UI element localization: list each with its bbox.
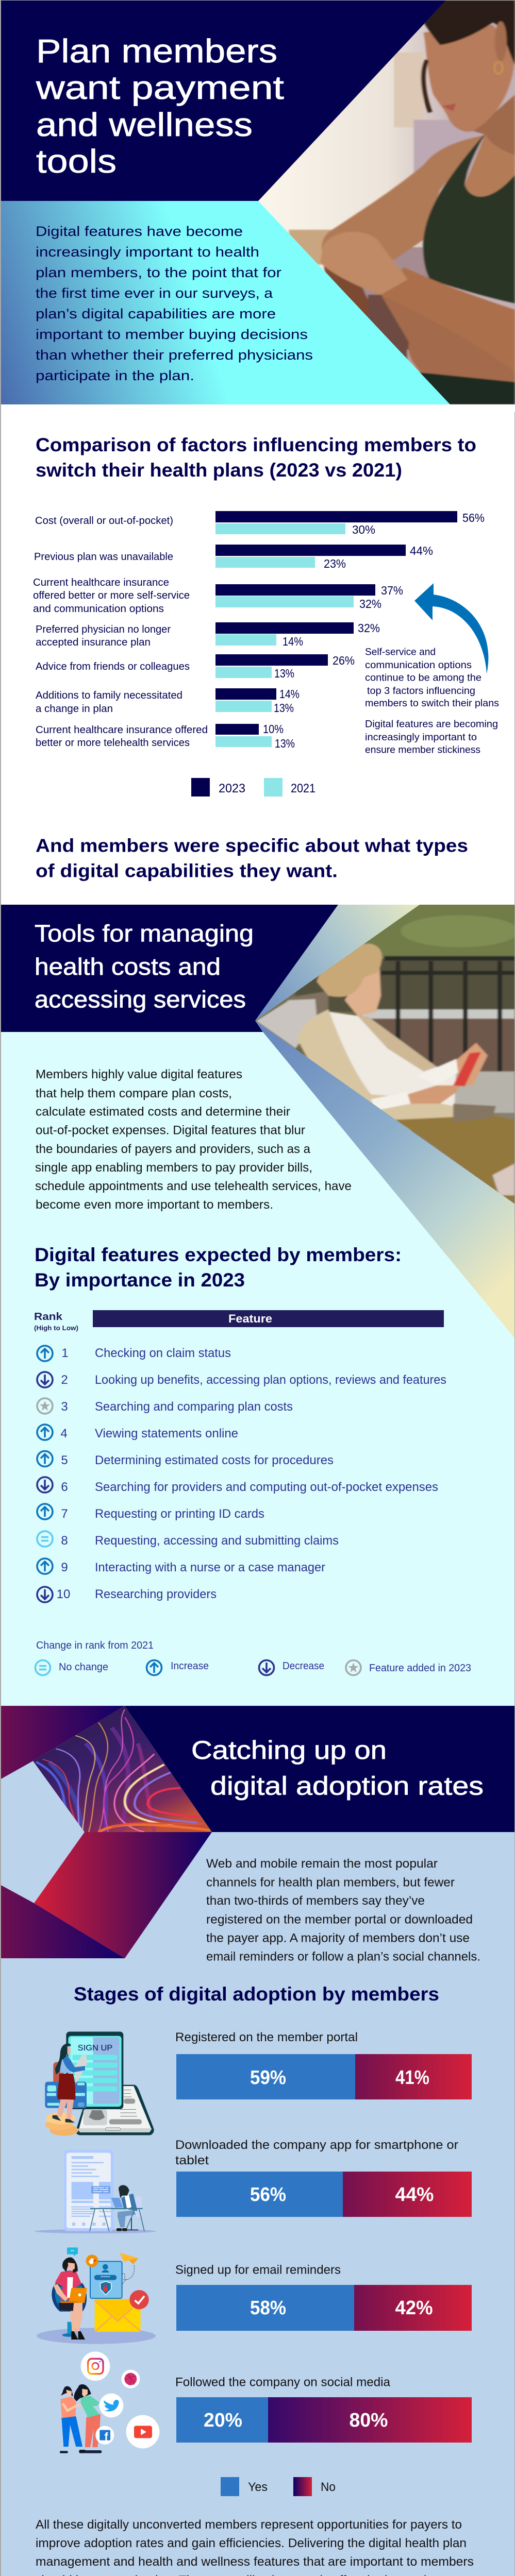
- icon: up: [37, 1346, 53, 1361]
- bar chart: 32%: [358, 621, 380, 635]
- label and bar: member portal: 41%: [395, 2067, 429, 2089]
- intro text: plan members, to the point that for: [36, 265, 281, 280]
- icon: down: [37, 1587, 53, 1602]
- closing text: management and health and wellness features that are important to members: [36, 2555, 474, 2569]
- callout: top 3 factors influencing: [367, 685, 475, 697]
- label and bar: email reminders: [175, 2263, 472, 2331]
- label and bar: social media: 20%: [204, 2410, 242, 2431]
- title: Tools for managing: [35, 920, 254, 947]
- closing text: [35, 2518, 474, 2576]
- bar chart: better or more telehealth services: [36, 737, 190, 749]
- bar chart: accepted insurance plan: [36, 637, 151, 648]
- icon: up: [37, 1451, 53, 1466]
- table: ranked features: 9: [61, 1561, 68, 1574]
- bar chart: 26%: [333, 654, 355, 667]
- illustration: email reminders: ******: [101, 2276, 110, 2280]
- panel: comparison of switching factors: [33, 434, 499, 881]
- table: ranked features: 3: [61, 1400, 68, 1414]
- table: ranked features: Determining estimated costs for procedures: [95, 1453, 334, 1467]
- callout: continue to be among the: [365, 672, 481, 683]
- callout: [365, 646, 499, 755]
- illustration: email reminders: •••: [71, 2249, 74, 2253]
- intro text: plan’s digital capabilities are more: [36, 306, 276, 321]
- title: want payment: [36, 69, 284, 106]
- legend: change in rank: No change: [59, 1662, 108, 1673]
- label and bar: member portal: Registered on the member portal: [175, 2030, 358, 2044]
- icon: up: [37, 1425, 53, 1440]
- intro text: increasingly important to health: [36, 244, 259, 260]
- label and bar: social media: [175, 2375, 472, 2443]
- bar chart: 14%: [283, 635, 303, 648]
- bar chart: offered better or more self-service: [33, 590, 190, 601]
- heading: members specifics: of digital capabilities they want.: [36, 860, 338, 881]
- body text: email reminders or follow a plan’s social channels.: [206, 1950, 480, 1964]
- heading: [35, 1244, 402, 1291]
- table: ranked features: Interacting with a nurse or a case manager: [95, 1561, 325, 1574]
- legend: [191, 778, 315, 796]
- legend: yes no: No: [321, 2480, 336, 2494]
- panel: catching up on digital adoption: [0, 1703, 515, 2576]
- label and bar: company app: tablet: [175, 2154, 209, 2167]
- legend: change in rank: Feature added in 2023: [369, 1663, 471, 1674]
- illustration: downloaded app: [35, 2149, 156, 2233]
- table: rank header: Rank: [34, 1311, 63, 1323]
- table: ranked features: Looking up benefits, accessing plan options, reviews and features: [95, 1373, 446, 1387]
- table: ranked features: Requesting or printing ID cards: [95, 1507, 264, 1521]
- body text: schedule appointments and use telehealth services, have: [35, 1179, 352, 1193]
- callout: Digital features are becoming: [365, 718, 498, 730]
- bar chart: [33, 511, 485, 750]
- callout: increasingly important to: [365, 732, 477, 743]
- heading: Comparison of factors influencing members to: [36, 434, 476, 455]
- intro text: important to member buying decisions: [36, 327, 308, 342]
- body text: than two-thirds of members say they’ve: [206, 1894, 425, 1908]
- bar chart: Current healthcare insurance offered: [36, 724, 208, 736]
- illustration: social media: [60, 2351, 159, 2453]
- heading: switch their health plans (2023 vs 2021): [36, 460, 402, 481]
- bar chart: 13%: [274, 667, 294, 680]
- image: abstract light swirl: [31, 1703, 217, 1837]
- bar chart: 23%: [324, 557, 346, 570]
- callout: members to switch their plans: [365, 698, 499, 709]
- legend: yes no: [221, 2477, 336, 2496]
- heading: members specifics: [36, 835, 468, 881]
- bar chart: Current healthcare insurance: [33, 577, 169, 588]
- body text: Members highly value digital features: [36, 1067, 242, 1081]
- table: ranked features: 4: [60, 1427, 68, 1440]
- legend: change in rank: Increase: [171, 1660, 209, 1672]
- icon: down: [37, 1372, 53, 1387]
- arrow: curved pointer: [414, 583, 488, 674]
- heading: Digital features expected by members:: [35, 1244, 402, 1265]
- table: ranked features: 8: [61, 1534, 68, 1548]
- label and bar: company app: Downloaded the company app for smartphone or: [175, 2138, 458, 2152]
- icon: up: [37, 1504, 53, 1519]
- intro text: [36, 224, 313, 383]
- photo: woman using phone on porch: [247, 902, 515, 1211]
- legend: 2023: [219, 782, 245, 795]
- legend: change in rank: [35, 1640, 471, 1675]
- illustration: social media: f: [104, 2430, 108, 2443]
- bar chart: 44%: [410, 544, 433, 557]
- table: rank header: (High to Low): [34, 1324, 78, 1332]
- bar chart: 56%: [462, 511, 485, 524]
- bar chart: Cost (overall or out-of-pocket): [35, 515, 173, 527]
- label and bar: company app: [175, 2138, 472, 2217]
- bar chart: 37%: [381, 584, 403, 597]
- table: ranked features: Viewing statements online: [95, 1427, 238, 1440]
- legend: yes no: Yes: [248, 2480, 268, 2494]
- icon: down: [37, 1477, 53, 1493]
- table: ranked features: Requesting, accessing and submitting claims: [95, 1534, 339, 1548]
- body text: single app enabling members to pay provider bills,: [35, 1161, 312, 1175]
- body text: calculate estimated costs and determine their: [36, 1105, 290, 1119]
- callout: ensure member stickiness: [365, 744, 480, 755]
- closing text: All these digitally unconverted members represent opportunities for payers to: [36, 2518, 462, 2532]
- body text: Web and mobile remain the most popular: [206, 1857, 438, 1871]
- icon: up: [37, 1558, 53, 1574]
- intro text: Digital features have become: [36, 224, 243, 239]
- bar chart: Additions to family necessitated: [36, 690, 182, 701]
- label and bar: email reminders: Signed up for email reminders: [175, 2263, 341, 2277]
- illustration: sign up: SIGN UP: [78, 2044, 112, 2053]
- body text: [206, 1857, 480, 1964]
- icon: no change: [37, 1531, 53, 1547]
- body text: the boundaries of payers and providers, such as a: [36, 1142, 311, 1156]
- intro text: participate in the plan.: [36, 368, 194, 383]
- bar chart: Previous plan was unavailable: [34, 551, 173, 563]
- label and bar: email reminders: 58%: [250, 2297, 286, 2319]
- table: ranked features: Researching providers: [95, 1587, 217, 1601]
- title: and wellness: [36, 106, 253, 143]
- table: rank header: [34, 1310, 444, 1332]
- title: [191, 1736, 484, 1800]
- illustration: email reminders: [37, 2247, 156, 2344]
- bar chart: 32%: [359, 597, 381, 611]
- closing text: improve adoption rates and gain efficiencies. Delivering the digital health plan: [36, 2536, 467, 2550]
- table: ranked features: Searching and comparing plan costs: [95, 1400, 293, 1414]
- bar chart: 14%: [279, 687, 300, 701]
- callout: communication options: [365, 659, 472, 671]
- illustration: sign up: [45, 2031, 154, 2136]
- bar chart: 30%: [352, 523, 375, 536]
- body text: become even more important to members.: [36, 1198, 273, 1212]
- title: [35, 920, 254, 1013]
- heading: members specifics: And members were specific about what types: [36, 835, 468, 856]
- legend: change in rank: Change in rank from 2021: [36, 1640, 154, 1651]
- label and bar: social media: Followed the company on social media: [175, 2375, 391, 2389]
- body text: out-of-pocket expenses. Digital features that blur: [36, 1123, 305, 1138]
- title: Plan members: [36, 32, 277, 70]
- bar chart: and communication options: [33, 603, 164, 615]
- heading: By importance in 2023: [35, 1269, 245, 1291]
- body text: that help them compare plan costs,: [36, 1087, 232, 1100]
- title: [36, 32, 284, 180]
- heading: stages: Stages of digital adoption by members: [74, 1984, 439, 2005]
- title: accessing services: [35, 986, 246, 1013]
- label and bar: company app: 56%: [250, 2184, 286, 2206]
- title: digital adoption rates: [210, 1771, 484, 1800]
- body text: the payer app. A majority of members don’t use: [206, 1931, 470, 1945]
- photo: woman checking fitness tracker: [247, 0, 515, 407]
- table: rank header: Feature: [228, 1312, 272, 1325]
- table: ranked features: 7: [61, 1507, 68, 1521]
- panel: tools for managing health costs: [0, 902, 515, 1706]
- table: ranked features: 2: [61, 1373, 68, 1387]
- heading: [36, 434, 476, 481]
- bar chart: 10%: [263, 722, 284, 736]
- body text: registered on the member portal or downloaded: [206, 1912, 473, 1927]
- body text: [35, 1067, 352, 1212]
- label and bar: company app: 44%: [395, 2184, 434, 2206]
- panel: hero header: [0, 0, 515, 407]
- label and bar: email reminders: 42%: [395, 2297, 433, 2319]
- label and bar: social media: 80%: [350, 2410, 388, 2431]
- bar chart: a change in plan: [36, 703, 113, 715]
- bar chart: Preferred physician no longer: [36, 624, 171, 635]
- bar chart: Advice from friends or colleagues: [36, 661, 190, 672]
- table: ranked features: 1: [61, 1346, 69, 1360]
- title: tools: [36, 143, 117, 180]
- table: ranked features: 6: [61, 1480, 68, 1494]
- title: health costs and: [35, 953, 221, 980]
- table: ranked features: Checking on claim status: [95, 1346, 231, 1360]
- icon: star: [37, 1398, 53, 1414]
- bar chart: 13%: [275, 737, 295, 750]
- table: ranked features: 5: [61, 1453, 68, 1467]
- table: ranked features: 10: [57, 1587, 70, 1601]
- legend: change in rank: Decrease: [283, 1660, 324, 1672]
- callout: Self-service and: [365, 646, 436, 657]
- table: ranked features: [37, 1346, 446, 1602]
- label and bar: member portal: 59%: [250, 2067, 286, 2089]
- legend: 2021: [291, 782, 315, 795]
- intro text: the first time ever in our surveys, a: [36, 285, 273, 301]
- bar chart: 13%: [274, 701, 294, 715]
- label and bar: member portal: [175, 2030, 472, 2099]
- intro text: than whether their preferred physicians: [36, 347, 313, 363]
- table: ranked features: Searching for providers and computing out-of-pocket expenses: [95, 1480, 438, 1494]
- title: Catching up on: [191, 1736, 387, 1765]
- body text: channels for health plan members, but fewer: [206, 1875, 455, 1890]
